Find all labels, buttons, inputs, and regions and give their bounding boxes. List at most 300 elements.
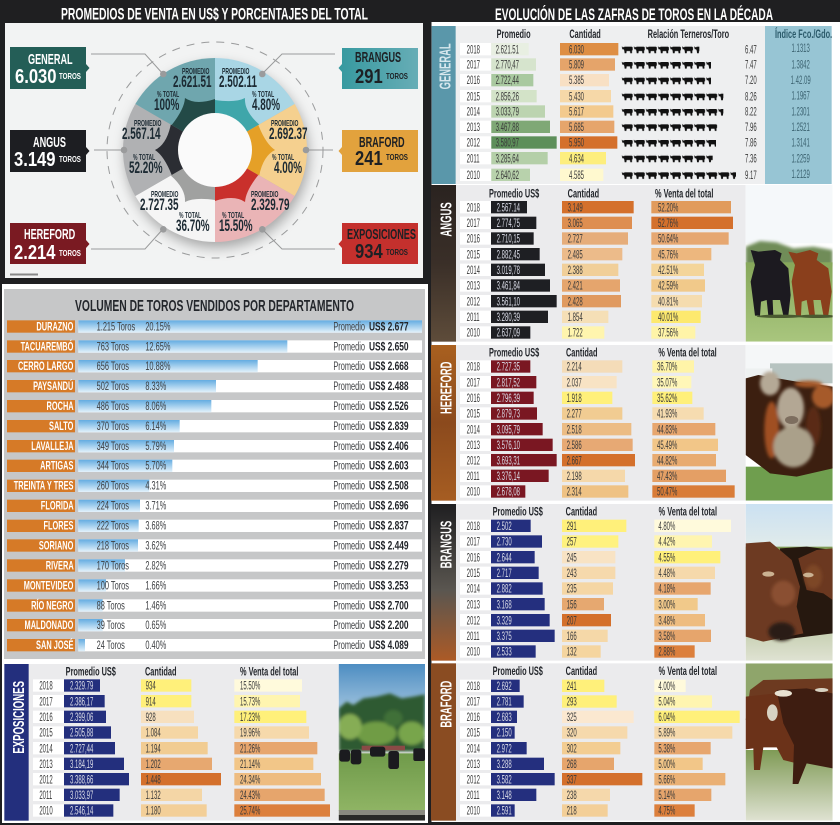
cantidad bars — [562, 520, 626, 659]
department rows: Promedio — [333, 600, 365, 613]
department rows: ROCHA — [47, 400, 74, 414]
department rows: 1.215 Toros — [97, 321, 135, 334]
years: 2014 — [467, 583, 480, 596]
department rows: 2.82% — [145, 560, 166, 573]
connector dots — [121, 71, 309, 233]
department rows: 3.62% — [145, 540, 166, 553]
cantidad bars: 238 — [567, 789, 577, 803]
years: 2010 — [467, 486, 480, 499]
column headers — [493, 506, 717, 519]
relación values: 7.86 — [745, 137, 757, 150]
department rows: 224 Toros — [97, 500, 129, 513]
photo: hereford bulls — [746, 345, 833, 501]
years: 2015 — [467, 727, 480, 740]
índice values: 1.2259 — [792, 152, 810, 166]
porcentaje bars — [234, 679, 330, 818]
column headers: % Venta del total — [240, 666, 299, 679]
callout: exposiciones: TOROS — [386, 247, 408, 257]
callout: brangus: TOROS — [386, 71, 408, 81]
cantidad bars: 1.084 — [146, 727, 161, 740]
cantidad bars: 2.314 — [567, 486, 582, 499]
callout: general: GENERAL — [28, 51, 73, 68]
relación values: 8.22 — [745, 106, 757, 119]
cantidad bars — [562, 201, 634, 340]
relación values: 9.17 — [745, 169, 757, 183]
promedio bars: 3.285,64 — [496, 152, 519, 166]
department rows: 88 Toros — [97, 600, 125, 613]
cantidad bars: 2.388 — [568, 264, 583, 278]
porcentaje bars: 15.50% — [240, 680, 261, 693]
years: 2015 — [467, 567, 480, 581]
department rows: 656 Toros — [97, 360, 129, 374]
department rows: Promedio — [333, 400, 365, 414]
photo: angus bulls — [746, 185, 833, 342]
donut labels: % TOTAL — [222, 212, 244, 220]
porcentaje bars — [651, 201, 733, 340]
donut labels: % TOTAL — [252, 91, 274, 99]
years: 2010 — [467, 646, 480, 659]
years — [460, 680, 491, 818]
years: 2013 — [467, 598, 480, 612]
cantidad bars — [562, 360, 635, 499]
department rows: Promedio — [333, 580, 365, 593]
callout: angus: 3.149 — [14, 148, 56, 170]
column headers: Cantidad — [566, 347, 597, 360]
cantidad bars: 2.727 — [568, 233, 583, 246]
donut labels — [122, 68, 308, 235]
department rows: FLORES — [43, 520, 74, 533]
porcentaje bars: 6.04% — [658, 711, 676, 725]
cantidad bars: 291 — [567, 520, 577, 534]
promedio bars: 3.033,79 — [496, 106, 519, 119]
years: 2010 — [467, 805, 480, 818]
porcentaje bars: 44.83% — [657, 423, 678, 437]
relación values: 7.20 — [745, 74, 757, 88]
donut shadow — [125, 64, 309, 248]
porcentaje bars: 52.76% — [658, 217, 679, 231]
years: 2015 — [467, 90, 480, 104]
department rows: FLORIDA — [41, 500, 74, 513]
índice values: 1.2301 — [792, 105, 810, 119]
column headers: Cantidad — [566, 665, 597, 679]
porcentaje bars: 41.93% — [657, 408, 678, 421]
department rows: ARTIGAS — [40, 460, 74, 473]
índice values — [791, 42, 811, 182]
índice values: 1.1967 — [792, 90, 810, 103]
department rows: US$ 2.837 — [369, 519, 409, 533]
porcentaje bars: 5.04% — [658, 696, 676, 709]
years: 2017 — [467, 217, 480, 231]
panel: donut promedios — [5, 23, 423, 278]
vertical label: angus: ANGUS — [438, 202, 455, 237]
icon: cattle rows — [622, 46, 736, 179]
donut labels: 52.20% — [129, 158, 163, 177]
promedio bars: 2.727,44 — [70, 742, 93, 756]
cantidad bars — [562, 680, 642, 818]
cantidad bars: 4.585 — [569, 169, 584, 183]
department rows: MALDONADO — [25, 619, 73, 633]
promedio bars: 2.774,75 — [497, 217, 520, 231]
department rows: US$ 2.526 — [369, 399, 409, 414]
índice values: 1.1313 — [792, 42, 810, 56]
donut labels: 4.80% — [252, 95, 280, 114]
years: 2012 — [467, 137, 480, 150]
years — [460, 43, 491, 183]
years: 2011 — [467, 152, 480, 166]
department rows: Promedio — [333, 460, 365, 473]
department rows: 4.31% — [145, 480, 166, 493]
cantidad bars: 2.198 — [567, 470, 582, 484]
cantidad bars: 2.037 — [567, 376, 582, 390]
years: 2011 — [39, 789, 52, 803]
cantidad bars: 325 — [567, 711, 577, 725]
column headers: Cantidad — [566, 506, 597, 519]
cantidad bars: 1.132 — [146, 789, 161, 803]
porcentaje bars: 36.70% — [657, 361, 678, 374]
promedio bars — [64, 679, 129, 818]
column headers: % Venta del total — [655, 188, 714, 201]
years: 2013 — [467, 280, 480, 293]
vertical label: braford: BRAFORD — [438, 681, 455, 728]
donut labels: PROMEDIO — [151, 191, 178, 199]
callout: angus: TOROS — [59, 154, 81, 164]
department rows: CERRO LARGO — [18, 360, 73, 374]
cantidad bars: 3.149 — [568, 201, 583, 215]
índice values: 1.3842 — [792, 58, 810, 72]
donut labels: 2.692.37 — [269, 124, 308, 143]
column headers: Promedio US$ — [66, 666, 116, 679]
donut labels: % TOTAL — [157, 91, 179, 99]
department rows: US$ 2.200 — [369, 618, 409, 633]
porcentaje bars: 4.42% — [658, 536, 676, 549]
promedio bars: 3.461,84 — [497, 280, 520, 293]
panel: angus — [431, 185, 837, 342]
promedio bars: 3.329 — [497, 614, 512, 628]
department rows: 370 Toros — [97, 420, 129, 434]
years: 2012 — [467, 614, 480, 628]
callout: general — [10, 47, 90, 89]
cantidad bars: 2.586 — [567, 439, 582, 453]
column headers: Cantidad — [569, 28, 601, 42]
department rows: 502 Toros — [97, 380, 129, 394]
porcentaje bars: 21.26% — [240, 742, 261, 756]
porcentaje bars: 4.00% — [658, 680, 676, 694]
donut labels: PROMEDIO — [251, 191, 278, 199]
column headers: Promedio US$ — [493, 506, 543, 519]
cantidad bars: 1.854 — [568, 311, 583, 325]
years: 2010 — [39, 805, 53, 818]
porcentaje bars: 3.48% — [658, 614, 676, 628]
donut labels: 2.329.79 — [251, 195, 290, 214]
department rows: 10.88% — [145, 360, 170, 374]
department rows: PAYSANDÚ — [33, 378, 73, 394]
porcentaje bars: 3.58% — [658, 630, 676, 644]
promedio bars: 2.856,26 — [496, 90, 519, 104]
promedio bars: 3.693,31 — [497, 454, 520, 468]
department rows: Promedio — [333, 360, 365, 374]
promedio bars: 3.033,97 — [70, 789, 93, 803]
porcentaje bars: 4.80% — [658, 520, 676, 534]
promedio bars: 2.879,73 — [497, 408, 520, 421]
cantidad bars: 156 — [567, 598, 577, 612]
promedio bars: 2.882,45 — [497, 248, 520, 262]
years: 2010 — [467, 327, 480, 340]
department rows: SORIANO — [39, 540, 73, 553]
department rows: Promedio — [333, 520, 365, 533]
panel: volumen por departamento — [4, 289, 425, 659]
donut labels: 15.50% — [219, 216, 253, 235]
promedio bars: 2.640,62 — [496, 169, 519, 183]
porcentaje bars: 5.00% — [658, 758, 676, 772]
cantidad bars: 218 — [567, 805, 577, 818]
donut labels: 100% — [154, 95, 179, 114]
promedio bars: 3.580,97 — [496, 137, 519, 150]
years — [460, 360, 491, 499]
callout: angus: ANGUS — [33, 134, 66, 151]
porcentaje bars: 5.89% — [658, 727, 676, 740]
years: 2017 — [467, 696, 480, 709]
callout: hereford: HEREFORD — [24, 226, 75, 243]
column headers: Promedio US$ — [489, 188, 540, 201]
department rows: 349 Toros — [97, 440, 129, 454]
department rows: 170 Toros — [97, 560, 129, 573]
promedio bars: 2.533 — [497, 646, 512, 659]
promedio bars — [491, 43, 557, 183]
department rows: 0.40% — [145, 639, 166, 653]
porcentaje bars: 52.20% — [658, 201, 679, 215]
years: 2014 — [467, 742, 480, 756]
promedio bars: 2.717 — [497, 567, 512, 581]
porcentaje bars: 44.82% — [657, 454, 678, 468]
promedio bars: 2.644 — [497, 551, 512, 565]
department rows: US$ 3.253 — [369, 579, 409, 593]
promedio bars: 2.683 — [497, 711, 512, 725]
years: 2014 — [39, 742, 53, 756]
panel frame: left bottom — [2, 284, 428, 823]
callout: exposiciones: EXPOSICIONES — [347, 226, 416, 243]
cantidad bars: 3.065 — [568, 217, 583, 231]
promedio bars — [491, 520, 555, 659]
panel: hereford — [431, 345, 835, 501]
promedio bars: 3.561,10 — [497, 295, 520, 309]
department rows — [7, 320, 422, 653]
relación values: 8.26 — [745, 90, 757, 104]
column headers — [493, 665, 717, 679]
years: 2014 — [467, 423, 480, 437]
panel: brangus — [431, 504, 833, 661]
cantidad bars: 320 — [567, 727, 577, 740]
panel frame: right column — [432, 22, 840, 822]
relación values — [745, 43, 757, 183]
years: 2016 — [467, 233, 480, 246]
donut labels: % TOTAL — [272, 154, 294, 162]
porcentaje bars: 47.43% — [657, 470, 678, 484]
department rows: US$ 4.089 — [369, 638, 409, 653]
promedio bars: 2.329.79 — [70, 680, 93, 693]
years: 2012 — [467, 295, 480, 309]
porcentaje bars: 50.47% — [657, 486, 678, 499]
promedio bars: 2.770,47 — [496, 58, 519, 72]
department rows: US$ 2.488 — [369, 379, 409, 394]
years: 2015 — [467, 248, 480, 262]
porcentaje bars: 40.01% — [658, 311, 679, 325]
column headers: Promedio US$ — [493, 665, 543, 679]
department rows: US$ 2.700 — [369, 599, 409, 613]
department rows: 8.06% — [145, 400, 166, 414]
promedio bars: 3.095,79 — [497, 423, 520, 437]
cantidad bars: 1.448 — [146, 773, 161, 787]
promedio bars: 3.582 — [497, 773, 512, 787]
porcentaje bars: 5.66% — [658, 773, 676, 787]
donut labels: % TOTAL — [179, 212, 201, 220]
department rows: Promedio — [333, 341, 365, 354]
years: 2018 — [467, 680, 480, 694]
department rows: TACUAREMBÓ — [21, 338, 73, 354]
cantidad bars: 914 — [146, 695, 156, 709]
cantidad bars: 934 — [146, 680, 156, 693]
porcentaje bars: 40.81% — [658, 295, 679, 309]
years: 2015 — [467, 408, 480, 421]
promedio bars: 3.184,19 — [70, 758, 93, 772]
years: 2016 — [467, 711, 480, 725]
years: 2017 — [467, 376, 480, 390]
donut labels: PROMEDIO — [134, 120, 161, 128]
cantidad bars: 4.634 — [569, 152, 584, 166]
department rows: US$ 2.406 — [369, 439, 409, 454]
cantidad bars: 5.385 — [569, 74, 584, 88]
porcentaje bars: 24.34% — [240, 773, 261, 787]
cantidad bars: 5.950 — [569, 137, 584, 150]
callout: exposiciones — [338, 223, 418, 264]
callout: braford: BRAFORD — [359, 134, 405, 151]
cantidad bars — [141, 679, 221, 818]
years: 2015 — [39, 727, 53, 740]
promedio bars: 2.972 — [497, 742, 512, 756]
department rows: 763 Toros — [97, 341, 129, 354]
department rows: Promedio — [333, 420, 365, 434]
cantidad bars: 5.430 — [569, 90, 584, 104]
porcentaje bars: 5.38% — [658, 742, 676, 756]
department rows: US$ 2.279 — [369, 559, 409, 573]
years: 2011 — [467, 789, 480, 803]
department rows: Promedio — [333, 380, 365, 394]
department rows: US$ 2.839 — [369, 419, 409, 434]
panel: general — [432, 26, 832, 184]
department rows: 218 Toros — [97, 540, 129, 553]
department rows: 344 Toros — [97, 460, 129, 473]
years: 2014 — [467, 106, 480, 119]
callout: braford: TOROS — [386, 152, 408, 162]
panel: exposiciones — [4, 664, 425, 821]
column headers: % Venta del total — [658, 347, 717, 360]
logo — [10, 274, 38, 276]
promedio bars: 2.692 — [497, 680, 512, 694]
department rows: 5.70% — [145, 460, 166, 473]
porcentaje bars: 15.73% — [240, 695, 261, 709]
porcentaje bars: 5.14% — [658, 789, 676, 803]
years: 2012 — [467, 773, 480, 787]
promedio bars: 3.388,66 — [70, 773, 93, 787]
porcentaje bars: 25.74% — [240, 805, 261, 818]
cantidad bars: 5.617 — [569, 106, 584, 119]
department rows: Promedio — [333, 639, 365, 653]
promedio bars: 2.505,88 — [70, 727, 93, 740]
donut labels: 2.621.51 — [173, 72, 212, 91]
department rows: 3.71% — [145, 500, 166, 513]
porcentaje bars: 4.75% — [658, 805, 676, 818]
porcentaje bars: 4.55% — [658, 551, 676, 565]
promedio bars: 3.148 — [497, 789, 512, 803]
porcentaje bars: 4.48% — [658, 567, 676, 581]
department rows: US$ 2.603 — [369, 459, 409, 473]
relación values: 7.47 — [745, 58, 757, 72]
years: 2011 — [467, 630, 480, 644]
column headers: Promedio — [497, 28, 531, 42]
promedio bars: 3.280,39 — [497, 311, 520, 325]
vertical label: general: GENERAL — [438, 43, 455, 89]
years: 2014 — [467, 264, 480, 278]
years: 2016 — [467, 74, 480, 88]
years: 2013 — [39, 758, 53, 772]
cantidad bars: 2.485 — [568, 248, 583, 262]
years: 2018 — [467, 361, 480, 374]
donut labels: 36.70% — [176, 216, 210, 235]
callout: braford: 241 — [355, 147, 383, 169]
promedio bars: 2.637,09 — [497, 327, 520, 340]
cantidad bars: 2.518 — [567, 423, 582, 437]
callout: brangus: BRANGUS — [355, 49, 401, 66]
department rows: Promedio — [333, 440, 365, 454]
years — [460, 520, 491, 659]
índice values: 1.3141 — [792, 137, 810, 150]
department rows: TREINTA Y TRES — [14, 480, 74, 493]
donut labels: 2.502.11 — [219, 72, 257, 91]
donut chart — [95, 35, 335, 265]
department rows: 0.65% — [145, 619, 166, 633]
cantidad bars: 337 — [567, 773, 577, 787]
porcentaje bars: 45.49% — [657, 439, 678, 453]
column headers: Promedio US$ — [489, 347, 540, 360]
department rows: LAVALLEJA — [31, 440, 74, 454]
years: 2018 — [467, 520, 480, 534]
department rows: US$ 2.677 — [369, 320, 409, 334]
cantidad bars: 166 — [567, 630, 577, 644]
years: 2017 — [39, 695, 53, 709]
promedio bars: 2.621.51 — [496, 43, 519, 57]
department rows: 5.79% — [145, 440, 166, 454]
years: 2013 — [467, 758, 480, 772]
índice values: 1.2129 — [792, 168, 810, 182]
photo: brangus cattle — [746, 504, 833, 660]
promedio bars: 2.882 — [497, 583, 512, 596]
department rows: SALTO — [49, 420, 73, 434]
cantidad bars: 1.202 — [146, 758, 161, 772]
department rows: 1.46% — [145, 600, 166, 613]
column headers: Relación Terneros/Toro — [648, 28, 729, 42]
cantidad bars: 302 — [567, 742, 577, 756]
department rows: US$ 2.668 — [369, 359, 409, 374]
cantidad bars: 6.030 — [569, 43, 584, 57]
porcentaje bars: 24.43% — [240, 789, 261, 803]
porcentaje bars — [654, 680, 740, 818]
cantidad bars: 268 — [567, 758, 577, 772]
department rows: MONTEVIDEO — [24, 580, 73, 593]
relación values: 6.47 — [745, 43, 757, 57]
porcentaje bars: 21.14% — [240, 758, 261, 772]
leader lines — [91, 54, 335, 249]
promedio bars: 2.781 — [497, 696, 512, 709]
promedio bars — [491, 201, 557, 340]
